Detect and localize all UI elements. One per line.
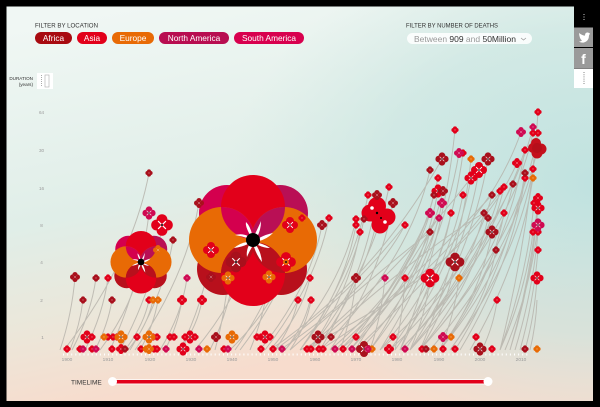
y axis: duration: 2 — [40, 298, 43, 303]
pill: Asia: Asia — [84, 33, 100, 43]
pill: Europe: Europe — [120, 33, 147, 43]
y axis: duration: 1 — [41, 335, 44, 340]
flower: large 50 million — [189, 175, 317, 306]
y axis: duration: (years) — [19, 82, 33, 87]
pill: North America — [159, 32, 229, 44]
timeline slider: TIMELIME — [71, 380, 102, 386]
flower: red cluster 1970s — [362, 197, 396, 234]
x axis: timeline ticks and years: 1970 — [351, 357, 362, 363]
x axis: timeline ticks and years: 2000 — [475, 357, 486, 363]
slider handle: start — [108, 377, 117, 386]
stems — [60, 112, 538, 350]
filter by number of deaths: Between 909 and 50Million — [414, 34, 516, 44]
x axis: timeline ticks and years: 1940 — [227, 357, 238, 363]
flowers: orange — [100, 155, 541, 354]
x axis: timeline ticks and years: 1900 — [62, 357, 73, 363]
flower: medium — [110, 231, 172, 293]
pill: North America: North America — [168, 33, 221, 43]
sidebar: menu — [574, 6, 593, 27]
x axis: timeline ticks and years — [62, 354, 530, 363]
x axis: timeline ticks and years: 1950 — [268, 357, 279, 363]
sidebar: more — [574, 68, 593, 88]
x axis: timeline ticks and years: 1990 — [434, 357, 445, 363]
slider handle: end — [484, 377, 492, 386]
y axis: duration: 4 — [40, 260, 43, 265]
flowers: dark red — [70, 152, 529, 357]
x axis: timeline ticks and years: 1980 — [392, 357, 403, 363]
sidebar: facebook — [574, 48, 593, 68]
x axis: timeline ticks and years: 2010 — [516, 357, 527, 363]
pill: South America: South America — [242, 33, 296, 43]
y axis: duration: 64 — [39, 110, 44, 115]
y axis: duration: 16 — [39, 186, 44, 191]
y axis: duration: 8 — [40, 223, 43, 228]
filter by number of deaths — [406, 22, 532, 44]
pill: Europe — [112, 32, 154, 44]
flower: dark cluster 2010s — [528, 138, 546, 158]
x axis: timeline ticks and years: 1960 — [310, 357, 321, 363]
pill: Africa: Africa — [43, 33, 64, 43]
pill: Asia — [77, 32, 107, 44]
filter by number of deaths: FILTER BY NUMBER OF DEATHS — [406, 22, 498, 30]
flowers: magenta — [79, 123, 545, 353]
x axis: timeline ticks and years: 1910 — [103, 357, 114, 363]
pill: Africa — [35, 32, 72, 44]
title: filter by location: FILTER BY LOCATION — [35, 22, 98, 30]
x axis: timeline ticks and years: 1930 — [186, 357, 197, 363]
flower: red on orange, lower right of large flower — [276, 252, 296, 272]
y axis: duration — [9, 73, 53, 340]
pill: South America — [234, 32, 304, 44]
x axis: timeline ticks and years: 1920 — [145, 357, 156, 363]
icon: duration sort — [37, 73, 53, 89]
sidebar: twitter — [574, 28, 593, 47]
y axis: duration: 30 — [39, 148, 44, 153]
title: filter by location — [35, 22, 304, 44]
timeline slider — [71, 377, 492, 386]
y axis: duration: DURATION — [9, 76, 33, 81]
sidebar: facebook: f — [581, 51, 586, 67]
flowers: red — [63, 108, 545, 356]
